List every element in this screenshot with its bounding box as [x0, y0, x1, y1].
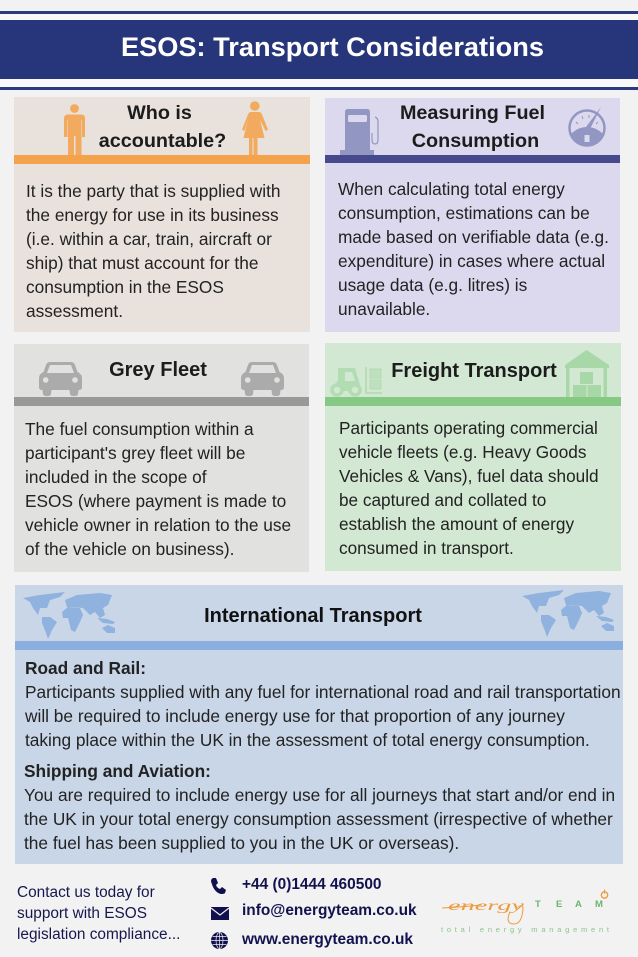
icon: world map left [23, 592, 115, 639]
panel: grey fleet [14, 344, 309, 572]
body text [26, 181, 281, 321]
body text: consumption, estimations can be [338, 203, 590, 223]
icon: envelope [211, 907, 229, 920]
contact details [242, 876, 417, 948]
road and rail text: Road and Rail: [25, 658, 146, 678]
body text: participant's grey fleet will be [25, 443, 245, 463]
body text: The fuel consumption within a [25, 419, 254, 439]
contact prompt: legislation compliance... [17, 926, 180, 943]
panel: measuring fuel consumption [325, 98, 620, 332]
body text: of the vehicle on business). [25, 539, 234, 559]
body text: assessment. [26, 301, 123, 321]
panel: who is accountable [14, 97, 310, 332]
icon: woman [242, 101, 268, 155]
logo: energy team: energy [448, 899, 526, 914]
logo: energy team: total energy management [441, 925, 610, 934]
body text [25, 419, 291, 559]
body text [339, 418, 599, 558]
heading: who is accountable: accountable? [99, 130, 226, 152]
body text: Participants operating commercial [339, 418, 598, 438]
icon: forklift [330, 367, 382, 397]
contact prompt: Contact us today for [17, 884, 155, 901]
body text: unavailable. [338, 299, 430, 319]
icon: car left [39, 362, 82, 396]
icon: fuel gauge [568, 107, 606, 147]
heading: measuring fuel consumption: Measuring Fuel [400, 102, 545, 124]
top band [0, 11, 638, 20]
body text: consumption in the ESOS [26, 277, 224, 297]
body text: the energy for use in its business [26, 205, 279, 225]
icon: phone [211, 878, 226, 894]
icon: warehouse [565, 350, 609, 397]
icon: man [64, 104, 85, 155]
logo: energy team: T [535, 899, 541, 910]
body text: ESOS (where payment is made to [25, 491, 286, 511]
logo: energy team: A [575, 899, 582, 910]
email: info@energyteam.co.uk [242, 902, 417, 919]
shipping and aviation text: You are required to include energy use for all journeys that start and/or end in [24, 785, 615, 805]
body text: usage data (e.g. litres) is [338, 275, 527, 295]
body text: consumed in transport. [339, 538, 514, 558]
body text: Vehicles & Vans), fuel data should [339, 466, 599, 486]
heading: grey fleet: Grey Fleet [109, 359, 207, 381]
body text: included in the scope of [25, 467, 207, 487]
contact prompt [17, 884, 180, 943]
road and rail text [25, 658, 621, 750]
body text: establish the amount of energy [339, 514, 574, 534]
shipping and aviation text: Shipping and Aviation: [24, 761, 211, 781]
grey bar [14, 397, 309, 406]
contact prompt: support with ESOS [17, 905, 147, 922]
orange bar [14, 155, 310, 164]
body text: vehicle owner in relation to the use [25, 515, 291, 535]
bottom band [0, 79, 638, 90]
road and rail text: Participants supplied with any fuel for international road and rail transportation [25, 682, 621, 702]
heading: international transport: International Transport [204, 605, 422, 627]
shipping and aviation text: the fuel has been supplied to you in the UK or overseas). [24, 833, 459, 853]
body text: expenditure) in cases where actual [338, 251, 605, 271]
heading: who is accountable [99, 102, 226, 152]
body text: When calculating total energy [338, 179, 565, 199]
heading: measuring fuel consumption [400, 102, 545, 152]
green bar [325, 397, 621, 406]
panel: international transport [15, 585, 623, 864]
blue bar [15, 641, 623, 650]
website: www.energyteam.co.uk [242, 931, 413, 948]
body text: made based on verifiable data (e.g. [338, 227, 609, 247]
body text: vehicle fleets (e.g. Heavy Goods [339, 442, 586, 462]
body text: ship) that must account for the [26, 253, 258, 273]
road and rail text: will be required to include energy use for that proportion of any journey [25, 706, 565, 726]
panel: freight transport [325, 343, 621, 571]
icon: car right [241, 362, 284, 396]
title banner: ESOS: Transport Considerations [121, 31, 544, 62]
logo: energy team: E [556, 899, 562, 910]
shipping and aviation text [24, 761, 615, 853]
heading: who is accountable: Who is [127, 102, 192, 124]
road and rail text: taking place within the UK in the assessment of total energy consumption. [25, 730, 590, 750]
heading: measuring fuel consumption: Consumption [412, 130, 539, 152]
shipping and aviation text: the UK in your total energy consumption assessment (irrespective of whether [24, 809, 613, 829]
logo: energy team: M [595, 899, 603, 910]
icon: globe [211, 932, 228, 949]
navy bar [325, 155, 620, 163]
body text [338, 179, 609, 319]
icon: fuel pump [340, 109, 379, 155]
icon: world map right [522, 590, 614, 637]
body text: (i.e. within a car, train, aircraft or [26, 229, 272, 249]
title banner [0, 20, 638, 79]
logo: energy team [441, 890, 610, 934]
body text: It is the party that is supplied with [26, 181, 281, 201]
phone number: +44 (0)1444 460500 [242, 876, 382, 893]
body text: be captured and collated to [339, 490, 546, 510]
heading: freight transport: Freight Transport [391, 360, 557, 382]
